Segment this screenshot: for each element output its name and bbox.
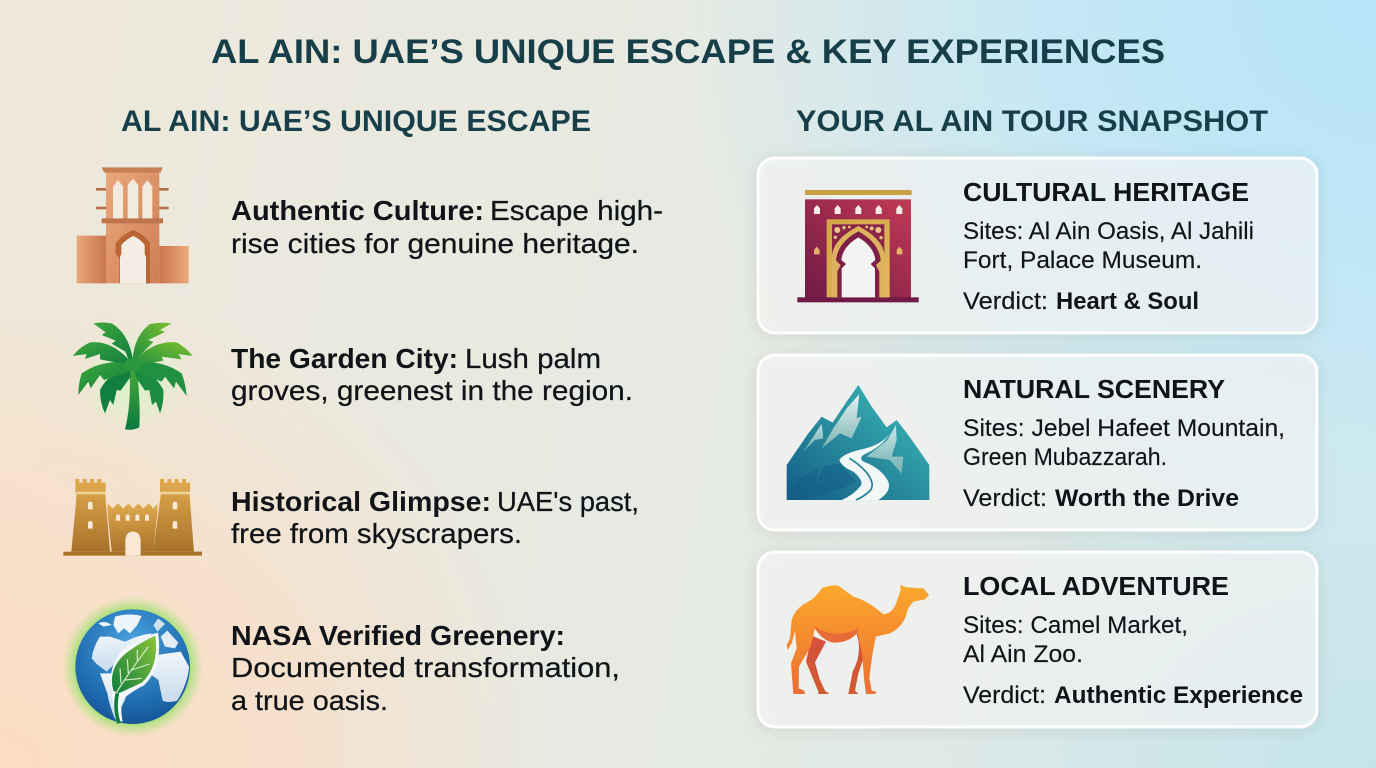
text: nasa verified greenery: [231, 620, 620, 716]
sites text: Al Ain Zoo.: [963, 641, 1083, 668]
icon: palm tree: [73, 322, 193, 433]
sites text: Sites: Camel Market,: [963, 612, 1188, 639]
text: historical glimpse: free from skyscrapers.: [231, 518, 522, 549]
text: the garden city: [231, 343, 633, 406]
card heading: LOCAL ADVENTURE: [963, 573, 1229, 601]
heading: right column: YOUR AL AIN TOUR SNAPSHOT: [796, 105, 1268, 138]
text: authentic culture: rise cities for genuine heritage.: [231, 228, 639, 259]
text: historical glimpse: [231, 486, 639, 549]
icon: wind tower: [77, 167, 189, 283]
icon: globe with leaf: [62, 596, 203, 737]
icon: camel: [787, 585, 929, 694]
verdict: [963, 485, 1239, 512]
heading: left column: AL AIN: UAE’S UNIQUE ESCAPE: [121, 105, 591, 138]
icon: mountain with road: [787, 385, 929, 500]
icon: fort: [63, 479, 202, 556]
verdict: [963, 288, 1199, 315]
text: the garden city: groves, greenest in the region.: [231, 375, 633, 406]
verdict: Verdict:: [963, 288, 1048, 315]
sites text: Sites: Al Ain Oasis, Al Jahili: [963, 218, 1254, 245]
verdict: Worth the Drive: [1055, 485, 1239, 512]
sites text: Sites: Jebel Hafeet Mountain,: [963, 415, 1285, 442]
text: the garden city: The Garden City:: [231, 343, 458, 374]
verdict: Verdict:: [963, 485, 1047, 512]
text: the garden city: Lush palm: [465, 343, 601, 374]
text: authentic culture: Authentic Culture:: [231, 195, 484, 226]
text: nasa verified greenery: NASA Verified Greenery:: [231, 620, 565, 651]
sites text: [963, 612, 1188, 668]
text: historical glimpse: Historical Glimpse:: [231, 486, 491, 517]
sites text: [963, 415, 1285, 471]
sites text: Fort, Palace Museum.: [963, 247, 1202, 274]
text: nasa verified greenery: a true oasis.: [231, 685, 388, 716]
text: historical glimpse: UAE's past,: [497, 486, 639, 517]
panel: local adventure: [758, 552, 1317, 727]
verdict: Authentic Experience: [1054, 682, 1303, 709]
verdict: Heart & Soul: [1056, 288, 1199, 315]
text: nasa verified greenery: Documented transformation,: [231, 652, 620, 683]
card heading: CULTURAL HERITAGE: [963, 179, 1249, 207]
icon: heritage gate: [797, 190, 919, 302]
sites text: Green Mubazzarah.: [963, 444, 1167, 471]
text: authentic culture: [231, 195, 663, 259]
card heading: NATURAL SCENERY: [963, 376, 1225, 404]
panel: cultural heritage: [758, 158, 1317, 333]
verdict: Verdict:: [963, 682, 1046, 709]
sites text: [963, 218, 1254, 274]
panel: natural scenery: [758, 355, 1317, 530]
text: authentic culture: Escape high-: [490, 195, 663, 226]
title: AL AIN: UAE’S UNIQUE ESCAPE & KEY EXPERIENCES: [211, 33, 1165, 71]
